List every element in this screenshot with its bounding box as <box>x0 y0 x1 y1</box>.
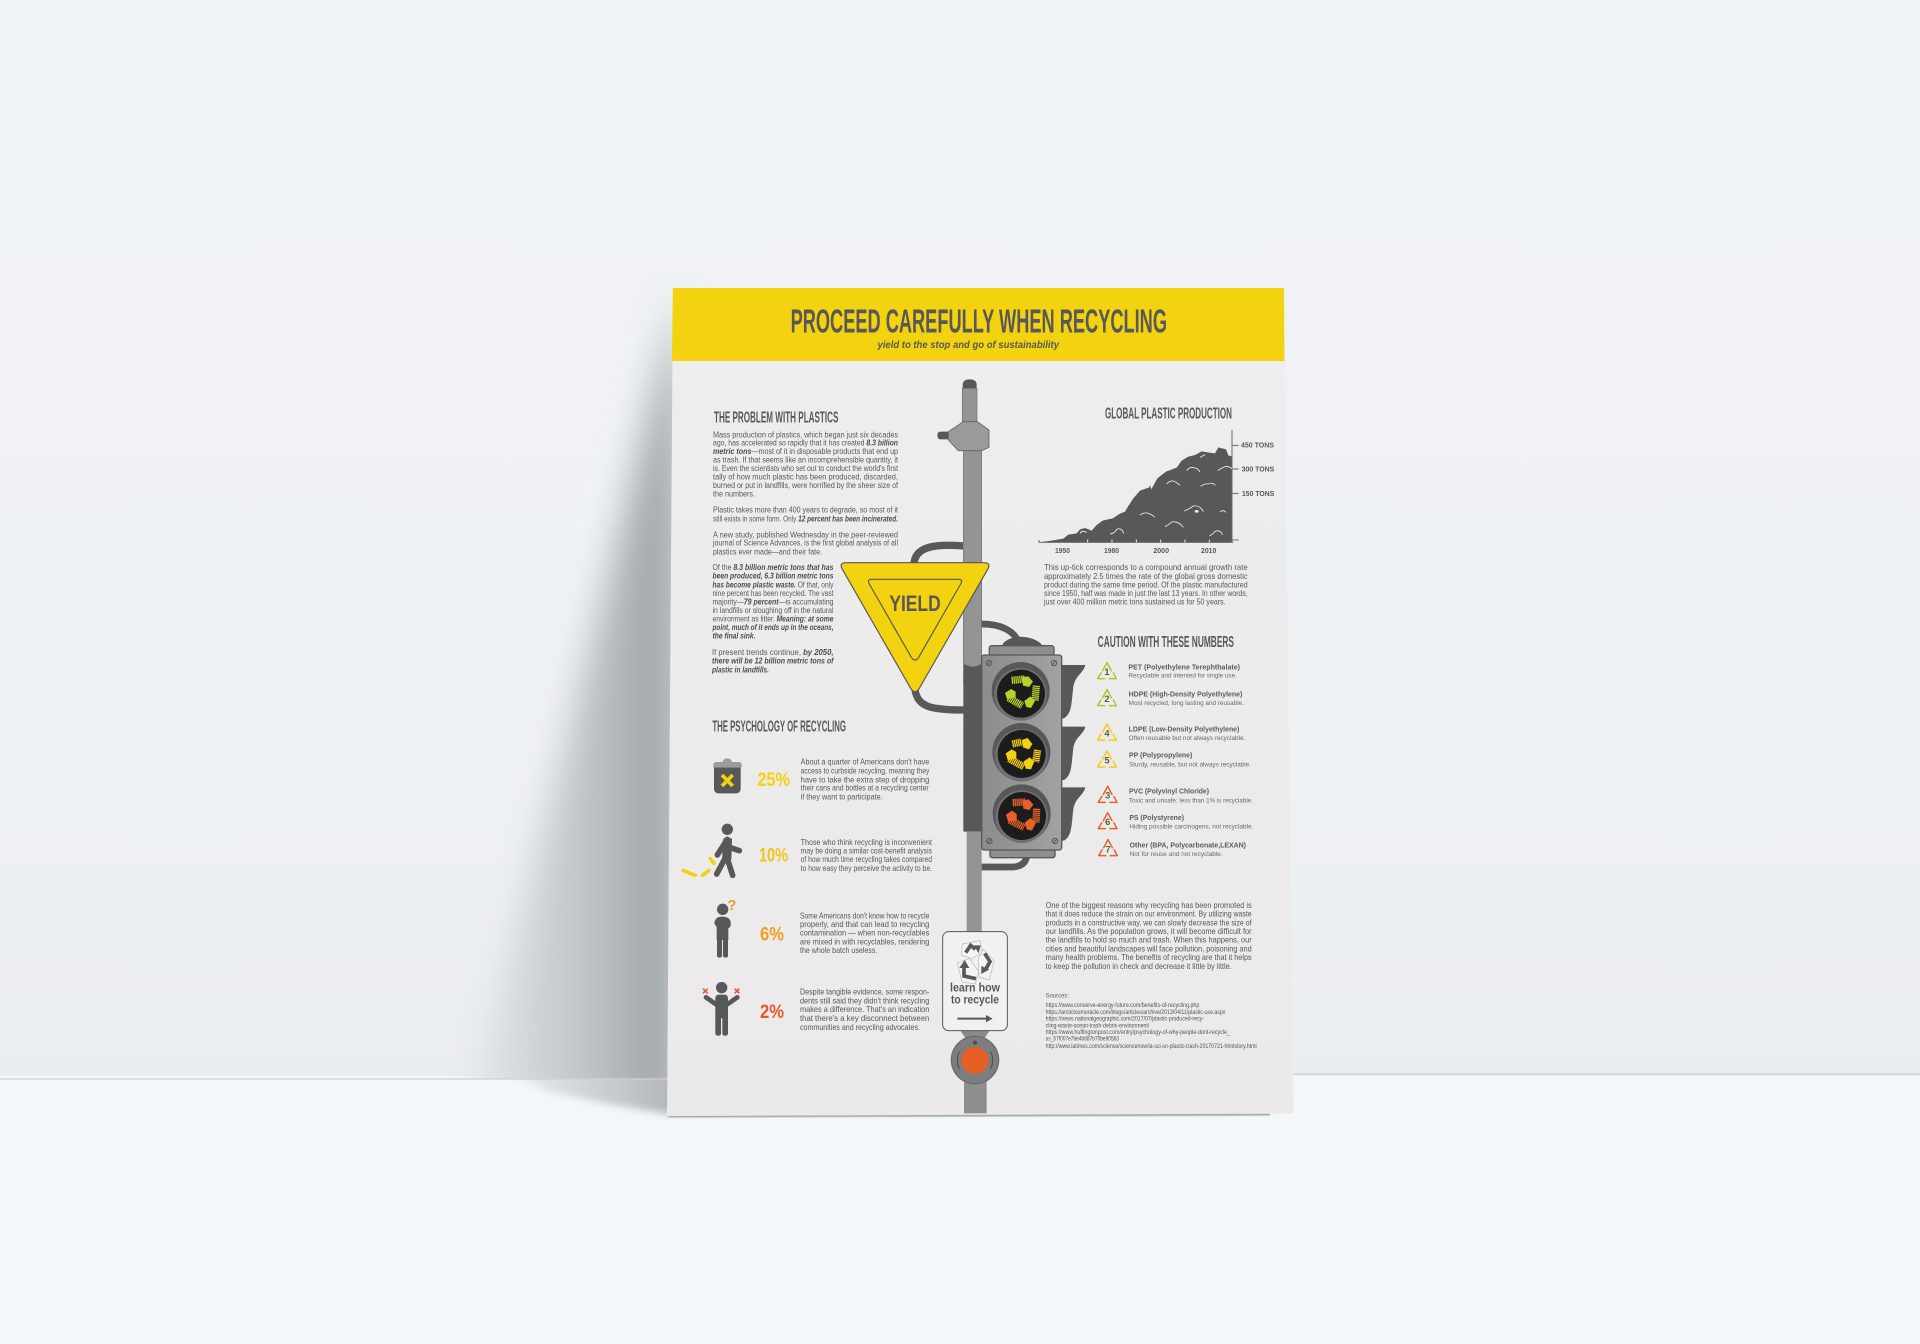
pole upper section <box>937 379 977 439</box>
text block: 2050 forecast: If present trends continue, by 2050, <box>712 648 834 657</box>
chart labels: years: 1950 <box>1055 548 1070 555</box>
sign: learn how to recycle: learn how <box>950 981 1000 995</box>
text block: new study <box>712 530 898 556</box>
plastic code 7 <box>1099 840 1247 858</box>
light: yellow <box>992 723 1050 782</box>
text block: degradation <box>713 506 899 523</box>
icon: confused person <box>714 898 736 958</box>
text block: intro: metric tons—most of it in disposable products that end up <box>713 447 899 456</box>
illustration: traffic light <box>963 624 1085 1092</box>
text block: 25 percent: if they want to participate. <box>801 792 883 801</box>
text block: sources: cling-waste-ocean-trash-debris-environment/ <box>1046 1023 1150 1029</box>
text block: benefits of recycling: many health problems. The benefits of recycling are that it helps <box>1046 953 1252 962</box>
header band <box>672 288 1284 361</box>
title: PROCEED CAREFULLY WHEN RECYCLING <box>791 302 1167 339</box>
plastic code 7: Other (BPA, Polycarbonate,LEXAN) <box>1130 840 1247 849</box>
text block: growth rate: product during the same time period. Of the plastic manufactured <box>1044 580 1248 589</box>
plastic code 5 <box>1098 751 1251 769</box>
chart labels: years <box>1055 548 1216 555</box>
poster <box>667 288 1293 1116</box>
text block: plastic waste: point, much of it ends up in the oceans, <box>712 623 834 632</box>
plastic code 3: Toxic and unsafe: less than 1% is recyclable. <box>1129 797 1253 804</box>
text block: 25 percent: their cans and bottles at a recycling center <box>801 784 929 793</box>
text block: 25 percent <box>801 758 929 801</box>
text block: intro: tally of how much plastic has been produced, discarded, <box>713 472 898 481</box>
icon: confused person: ? <box>727 898 736 914</box>
light: green <box>992 662 1050 721</box>
pole lower section <box>967 832 982 1092</box>
text block: sources: https://www.huffingtonpost.com/entry/psychology-of-why-people-dont-recycle_ <box>1046 1030 1231 1036</box>
poster shadow on floor <box>525 1080 668 1118</box>
plastic code 3: 3 <box>1105 791 1110 801</box>
text block: 2050 forecast <box>711 648 835 674</box>
text block: plastic waste: nine percent has been recycled. The vast <box>712 589 834 598</box>
text block: 2 percent <box>800 988 930 1032</box>
text block: growth rate: since 1950, half was made in just the last 13 years. In other words, <box>1044 589 1248 598</box>
text block: growth rate: approximately 2.5 times the rate of the global gross domestic <box>1044 572 1248 581</box>
plastic code 6: Hiding possible carcinogens, not recyclable. <box>1129 824 1253 831</box>
text block: degradation: Plastic takes more than 400 years to degrade, so most of it <box>713 506 899 515</box>
plastic code 1: PET (Polyethylene Terephthalate) <box>1128 662 1241 671</box>
sign connector <box>960 1030 990 1040</box>
text block: plastic waste: Of the 8.3 billion metric tons that has <box>712 563 834 572</box>
text block: 10 percent: of how much time recycling takes compared <box>801 855 932 864</box>
chart labels: tons: 450 TONS <box>1241 441 1274 450</box>
text block: plastic waste: in landfills or sloughing off in the natural <box>712 606 834 615</box>
signal visors <box>1061 665 1085 841</box>
stat: 25%: 25% <box>757 769 790 791</box>
plastic code 1 <box>1098 662 1241 680</box>
heading: caution with these numbers: CAUTION WITH THESE NUMBERS <box>1098 634 1234 651</box>
text block: sources: http://www.latimes.com/science/sciencenow/la-sci-sn-plastic-trash-20170721-htmlstory.html <box>1046 1044 1257 1050</box>
icon: doubtful person <box>703 982 739 1036</box>
text block: 6 percent: properly, and that can lead to recycling <box>800 920 929 929</box>
plastic code 4 <box>1098 724 1245 742</box>
area chart <box>1039 430 1239 542</box>
text block: benefits of recycling: products in a constructive way, we can slowly decrease the size of <box>1046 918 1252 927</box>
plastic code 6 <box>1098 813 1253 831</box>
text block: 25 percent: access to curbside recycling, meaning they <box>801 766 929 775</box>
plastic code 6: 6 <box>1105 817 1110 827</box>
plastic code 4: 4 <box>1104 728 1110 738</box>
panel: benefits and sources <box>1046 901 1257 1050</box>
text block: benefits of recycling: the landfills to hold so much and trash. When this happens, our <box>1046 936 1252 945</box>
yield sign <box>841 563 989 692</box>
poster sheet <box>667 288 1293 1116</box>
text block: 2 percent: that there's a key disconnect between <box>800 1014 929 1023</box>
arrow <box>957 1015 993 1022</box>
stat: 6%: 6% <box>760 925 784 946</box>
plastic code 6: PS (Polystyrene) <box>1129 813 1185 822</box>
icon: trash can with cross <box>713 758 742 793</box>
stat: 10%: 10% <box>759 845 788 866</box>
text block: 25 percent: have to take the extra step of dropping <box>801 775 929 784</box>
text block: 2 percent: dents still said they didn't think recycling <box>800 996 929 1005</box>
plastic code 5: Sturdy, reusable, but not always recyclable. <box>1129 762 1251 769</box>
subtitle: yield to the stop and go of sustainability <box>877 340 1060 351</box>
text block: 10 percent: Those who think recycling is inconvenient <box>801 838 933 847</box>
text block: new study: plastics ever made—and their fate. <box>713 547 822 556</box>
signal housing <box>982 655 1062 850</box>
signal bottom tab <box>990 849 1055 858</box>
stat: 2%: 2% <box>760 1002 784 1023</box>
text block: benefits of recycling: One of the biggest reasons why recycling has been promoted is <box>1046 901 1252 910</box>
text block: 10 percent <box>801 838 933 873</box>
panel: the problem with plastics <box>711 409 899 674</box>
housing screws <box>986 660 1058 844</box>
text block: growth rate: This up-tick corresponds to a compound annual growth rate <box>1044 563 1248 572</box>
plastic code 1: Recyclable and intented for single use. <box>1128 673 1237 680</box>
pole dark collar <box>963 657 982 683</box>
heading: global plastic production: GLOBAL PLASTIC PRODUCTION <box>1105 406 1232 423</box>
yield sign: YIELD <box>889 591 941 616</box>
text block: 2050 forecast: there will be 12 billion metric tons of <box>712 657 835 666</box>
text block: 6 percent: are mixed in with recyclables, rendering <box>800 937 929 946</box>
text block: sources <box>1046 993 1257 1050</box>
chart labels: tons: 150 TONS <box>1242 489 1274 498</box>
chart labels: years: 2010 <box>1201 548 1216 555</box>
floor background <box>0 1076 1920 1344</box>
text block: 6 percent: Some Americans don't know how to recycle <box>800 911 929 920</box>
text block: intro: as trash. If that seems like an incomprehensible quantity, it <box>713 455 899 464</box>
text block: 2 percent: Despite tangible evidence, some respon- <box>800 988 930 997</box>
text block: intro: burned or put in landfills, were horrified by the sheer size of <box>713 481 899 490</box>
signal top tab <box>989 646 1054 656</box>
chart labels: years: 2000 <box>1153 548 1169 555</box>
plastic code 2 <box>1098 689 1244 707</box>
text block: intro: the numbers. <box>713 489 755 498</box>
text block: intro: is. Even the scientists who set out to conduct the world's first <box>713 464 899 473</box>
heading: psychology of recycling: THE PSYCHOLOGY OF RECYCLING <box>712 718 846 735</box>
sign: learn how to recycle <box>943 932 1007 1031</box>
light: red <box>993 784 1051 843</box>
text block: plastic waste: environment as litter. Meaning: at some <box>712 614 834 623</box>
text block: sources: Sources: <box>1046 993 1069 1000</box>
text block: plastic waste: the final sink. <box>712 631 756 640</box>
text block: 6 percent: contamination — when non-recyclables <box>800 928 929 937</box>
text block: growth rate: just over 400 million metric tons sustained us for 50 years. <box>1043 597 1226 606</box>
plastic code 7: Not for reuse and not recyclable. <box>1130 851 1223 858</box>
chart labels: tons <box>1241 441 1274 498</box>
text block: plastic waste: majority—79 percent—is accumulating <box>712 597 834 606</box>
text block: sources: https://news.nationalgeographic.com/2017/07/plastic-produced-recy- <box>1046 1017 1204 1023</box>
text block: 2050 forecast: plastic in landfills. <box>711 665 769 674</box>
pole dark section <box>963 669 982 832</box>
text block: 10 percent: to how easy they perceive the activity to be. <box>801 864 932 873</box>
plastic code 7: 7 <box>1105 844 1111 854</box>
text block: intro: ago, has accelerated so rapidly that it has created 8.3 billion <box>713 439 898 448</box>
text block: 10 percent: may be doing a similar cost-benefit analysis <box>801 846 932 855</box>
yield sign arms <box>914 545 964 710</box>
text block: sources: https://www.conserve-energy-future.com/benefits-of-recycling.php <box>1046 1003 1200 1009</box>
text block: sources: https://arcticloumoracle.com/blogs/articles/archive/2013/04/11/plastic-use.aspx <box>1046 1010 1225 1016</box>
plastic code 3: PVC (Polyvinyl Chloride) <box>1129 787 1210 796</box>
sign: learn how to recycle: to recycle <box>951 992 999 1006</box>
text block: 2 percent: communities and recycling advocates. <box>800 1023 920 1032</box>
panel: caution with these numbers <box>1098 634 1253 858</box>
text block: growth rate <box>1043 563 1248 606</box>
icon: recycling symbol <box>957 941 994 984</box>
text block: benefits of recycling: that it does reduce the strain on our environment. By utilizing waste <box>1046 909 1252 918</box>
poster shadow on wall <box>474 312 672 1078</box>
pole joint <box>948 422 989 451</box>
illustration: crossing button sign <box>943 932 1007 1113</box>
text block: plastic waste: has become plastic waste. Of that, only <box>712 580 834 589</box>
text block: plastic waste: been produced, 6.3 billion metric tons <box>712 572 834 581</box>
text block: sources: us_57f007e7be4b887b70be905b3 <box>1046 1037 1120 1043</box>
text block: plastic waste <box>712 563 834 640</box>
text block: degradation: still exists in some form. Only 12 percent has been incinerated. <box>713 514 898 523</box>
icon: person littering <box>683 824 739 875</box>
plastic code 2: 2 <box>1104 694 1110 704</box>
signal arms <box>982 624 1043 867</box>
text block: benefits of recycling: our landfills. As the population grows, it will become difficult for <box>1046 927 1252 936</box>
plastic code 2: Most recycled, long lasting and reusable. <box>1129 700 1244 707</box>
plastic code 5: PP (Polypropylene) <box>1129 751 1193 760</box>
text block: 25 percent: About a quarter of Americans don't have <box>801 758 929 767</box>
text block: 6 percent <box>800 911 929 955</box>
panel: the psychology of recycling <box>683 718 933 1036</box>
plastic code 1: 1 <box>1104 667 1110 677</box>
text block: intro <box>713 430 899 498</box>
text block: 2 percent: makes a difference. That's an indication <box>800 1005 929 1014</box>
plastic code 3 <box>1098 786 1253 804</box>
chart labels: tons: 300 TONS <box>1242 465 1274 474</box>
text block: new study: journal of Science Advances, is the first global analysis of all <box>712 539 898 548</box>
crossing button <box>951 1036 999 1084</box>
text block: new study: A new study, published Wednesday in the peer-reviewed <box>713 530 898 539</box>
plastic code 4: Often reusable but not always recyclable. <box>1129 735 1245 742</box>
heading: the problem with plastics: THE PROBLEM WITH PLASTICS <box>714 409 838 426</box>
illustration: signal pole with yield sign <box>841 379 989 710</box>
text block: 6 percent: the whole batch useless. <box>800 946 877 955</box>
plastic code 5: 5 <box>1104 756 1110 766</box>
chart labels: years: 1980 <box>1104 548 1119 555</box>
text block: benefits of recycling: cities and beautiful landscapes will face pollution, poisoning and <box>1046 944 1252 953</box>
pole main section <box>963 450 982 667</box>
pole base <box>964 1073 987 1113</box>
text block: intro: Mass production of plastics, which began just six decades <box>713 430 898 439</box>
panel: global plastic production <box>1039 406 1274 606</box>
plastic code 4: LDPE (Low-Density Polyethylene) <box>1129 724 1240 733</box>
text block: benefits of recycling: to keep the pollution in check and decrease it little by little. <box>1046 962 1232 971</box>
text block: benefits of recycling <box>1046 901 1252 971</box>
plastic code 2: HDPE (High-Density Polyethylene) <box>1129 689 1243 698</box>
